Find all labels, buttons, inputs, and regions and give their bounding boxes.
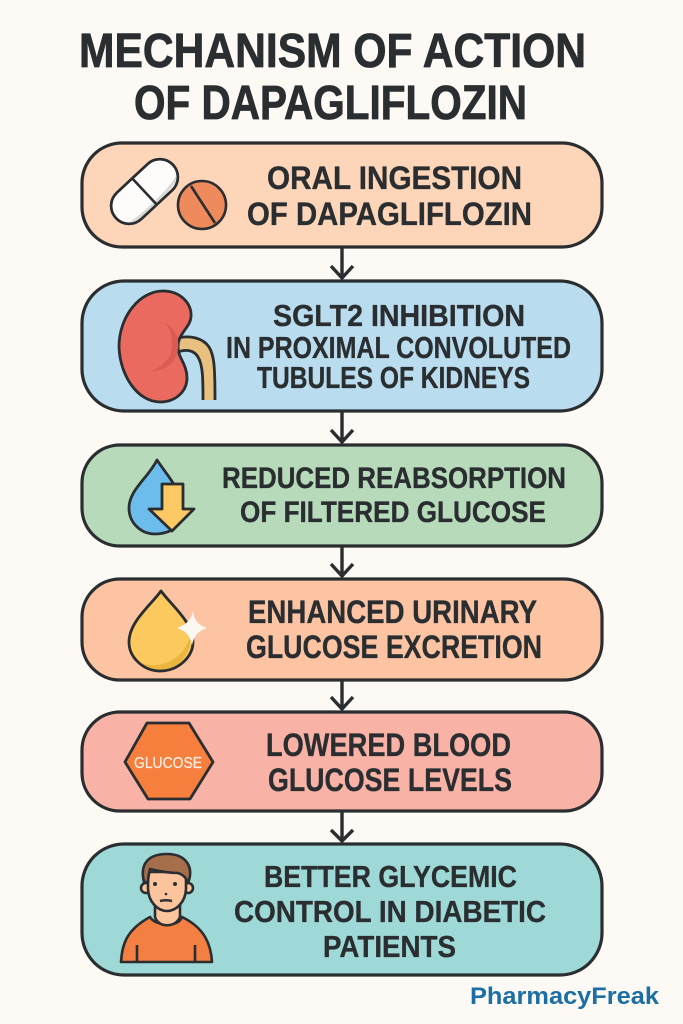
text: enhanced urinary excretion	[246, 594, 542, 665]
panel: enhanced urinary excretion	[82, 579, 602, 680]
icon: patient	[121, 854, 212, 962]
panel: lowered blood glucose	[82, 712, 602, 811]
title: MECHANISM OF ACTION	[79, 25, 586, 78]
text: better glycemic control: BETTER GLYCEMIC	[264, 859, 517, 894]
text: lowered blood glucose: LOWERED BLOOD	[266, 727, 511, 763]
text: oral ingestion	[247, 160, 532, 232]
logo text: PharmacyFreak: PharmacyFreak	[470, 983, 660, 1010]
arrow: step 3 to 4	[331, 546, 353, 577]
icon: kidney with ureter	[119, 291, 215, 402]
panel: oral ingestion	[82, 143, 602, 247]
text: enhanced urinary excretion: ENHANCED URINARY	[248, 594, 537, 630]
text: SGLT2 inhibition: SGLT2 INHIBITION	[273, 298, 525, 333]
arrow: step 5 to 6	[331, 811, 353, 842]
text: oral ingestion: ORAL INGESTION	[267, 160, 522, 196]
text: SGLT2 inhibition: IN PROXIMAL CONVOLUTED	[226, 330, 571, 365]
text: reduced reabsorption: OF FILTERED GLUCOSE	[240, 496, 546, 529]
title	[79, 25, 586, 130]
text: SGLT2 inhibition: TUBULES OF KIDNEYS	[257, 360, 530, 395]
arrow: step 4 to 5	[331, 680, 353, 710]
text: better glycemic control: CONTROL IN DIABETIC	[234, 894, 546, 929]
text: better glycemic control	[234, 859, 546, 964]
title: OF DAPAGLIFLOZIN	[134, 77, 527, 130]
panel: better glycemic control	[82, 844, 602, 975]
text: lowered blood glucose	[266, 727, 512, 798]
icon: glucose hexagon: GLUCOSE	[134, 755, 202, 772]
icon: capsule and tablet	[104, 152, 226, 231]
text: SGLT2 inhibition	[226, 298, 571, 395]
icon: glucose hexagon	[125, 723, 213, 799]
panel: reduced reabsorption	[82, 445, 602, 546]
text: lowered blood glucose: GLUCOSE LEVELS	[268, 762, 512, 798]
icon: water drop with down arrow	[129, 460, 194, 534]
arrow: step 2 to 3	[331, 411, 353, 443]
arrow: step 1 to 2	[331, 247, 353, 279]
text: better glycemic control: PATIENTS	[323, 929, 456, 964]
text: reduced reabsorption	[222, 462, 566, 529]
text: reduced reabsorption: REDUCED REABSORPTION	[222, 462, 566, 495]
icon: glucose drop with sparkle	[129, 591, 207, 671]
panel: SGLT2 inhibition	[82, 281, 602, 411]
text: oral ingestion: OF DAPAGLIFLOZIN	[247, 196, 532, 232]
text: enhanced urinary excretion: GLUCOSE EXCRETION	[246, 629, 542, 665]
